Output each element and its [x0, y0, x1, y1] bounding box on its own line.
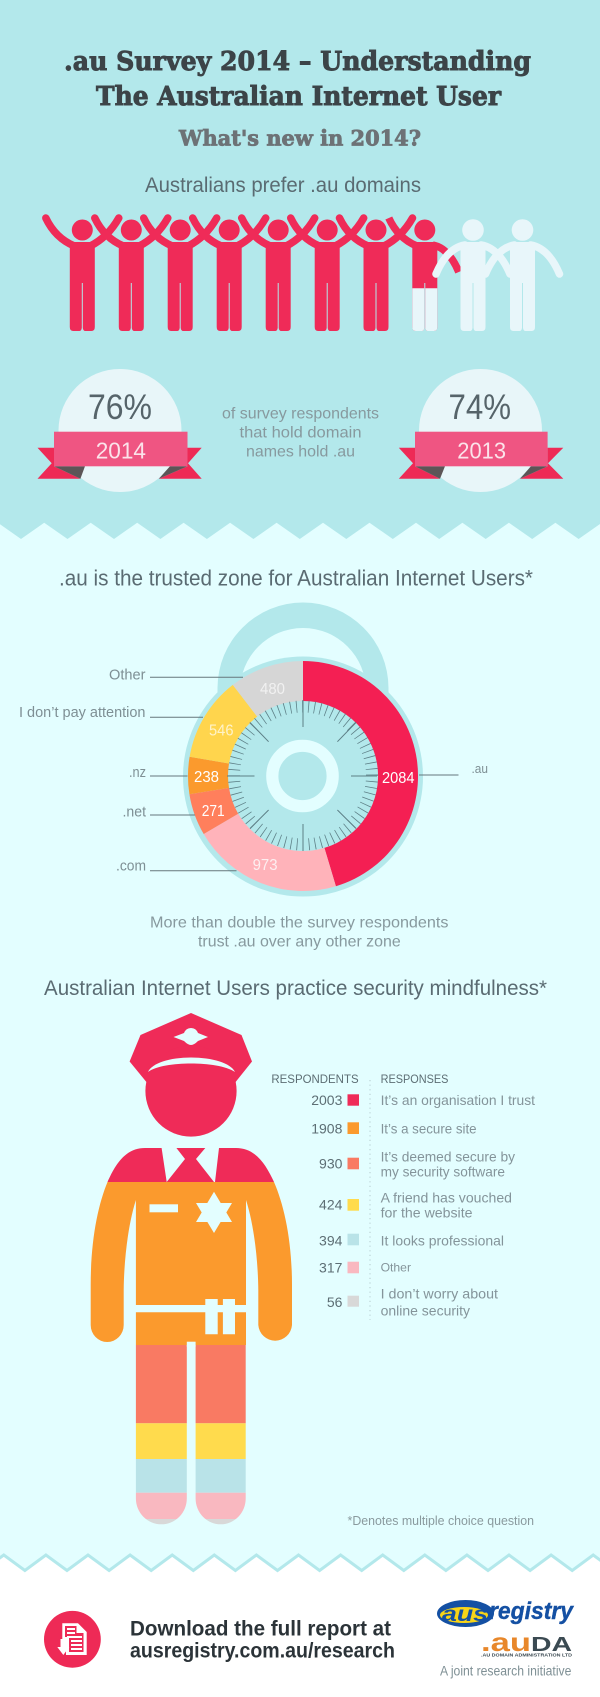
icon: download document [44, 1611, 101, 1668]
segment values: 480 [260, 681, 285, 698]
icon: left leg [135, 1345, 188, 1525]
badge: 74% 2013 [399, 369, 563, 492]
segment values: 2084 [382, 770, 415, 787]
text: of survey respondents: of survey respondents [222, 405, 379, 422]
footer band with zigzag edge [0, 1555, 600, 1697]
dial ticks [227, 700, 377, 851]
donut segment: .au 2084 [303, 661, 418, 886]
dial centre ring [272, 746, 333, 806]
row 930: 930 [319, 1156, 343, 1172]
badge: 76% 2014: 2014 [96, 437, 146, 463]
chart labels and leader lines: I don’t pay attention [19, 704, 146, 721]
call to action text [130, 1617, 395, 1662]
donut segment: .net 271 [189, 788, 238, 834]
caption: more than double [150, 914, 448, 951]
donut segment: .nz 238 [188, 757, 229, 794]
icon: belt and buckle [135, 1299, 246, 1334]
icon: orange shirt [91, 1182, 292, 1345]
icon: red person 4 [193, 218, 266, 331]
icon: red person 7 [340, 218, 412, 331]
row 394: 394 [319, 1232, 343, 1248]
segment values [194, 681, 415, 874]
icon: red person 1 [46, 218, 119, 331]
row 317: Other [381, 1261, 411, 1275]
title: The Australian Internet User [96, 82, 501, 112]
donut segment: .com 973 [204, 814, 336, 891]
text: of survey respondents [222, 405, 379, 460]
chart labels and leader lines [19, 666, 488, 875]
row 2003: It’s an organisation I trust [381, 1092, 535, 1108]
icon: red person 6 [291, 218, 364, 331]
leg gap [187, 1342, 196, 1347]
icon: white person 10 [486, 219, 560, 331]
icon: hat band [148, 1058, 235, 1072]
row 424: A friend has vouched [381, 1190, 512, 1206]
segment values: 546 [209, 723, 234, 740]
logo: auDA: .AU DOMAIN ADMINISTRATION LTD [481, 1652, 573, 1658]
segment values: 238 [194, 769, 219, 786]
row 56 [327, 1286, 498, 1318]
logo: auDA: .au [481, 1627, 531, 1657]
icon: red person 5 [242, 218, 315, 331]
row 930: It’s deemed secure by [381, 1148, 515, 1164]
caption: more than double: More than double the survey respondents [150, 914, 448, 931]
donut segment: other 480 [233, 661, 303, 717]
row 56: 56 [327, 1294, 343, 1310]
row 317: 317 [319, 1260, 343, 1276]
donut segment: don't pay attention 546 [190, 685, 257, 764]
heading: Australians prefer .au domains: Australians prefer .au domains [145, 174, 421, 197]
chart: padlock donut [183, 603, 423, 896]
table headers: RESPONDENTS [271, 1074, 359, 1086]
row 394 [319, 1232, 504, 1248]
text: of survey respondents: names hold .au [246, 443, 355, 460]
icon: white person 9 [436, 219, 510, 331]
table headers: RESPONSES [381, 1074, 449, 1086]
icon: lock shackle [218, 603, 388, 700]
row 424 [319, 1190, 512, 1220]
row 930: my security software [381, 1164, 505, 1180]
icon: red person 2 [95, 218, 168, 331]
chart labels and leader lines: Other [109, 666, 146, 683]
logo: ausregistry: aus [442, 1603, 488, 1626]
table headers [271, 1074, 449, 1320]
row 317 [319, 1260, 411, 1276]
icon: right leg [195, 1345, 247, 1525]
title [64, 47, 531, 112]
chart labels and leader lines: .net [122, 804, 147, 821]
icon: lock body [183, 656, 423, 896]
segment values: 973 [253, 857, 278, 874]
call to action text: ausregistry.com.au/research [130, 1638, 395, 1662]
badge: 76% 2014 [38, 369, 202, 492]
row 56: I don’t worry about [381, 1286, 498, 1302]
subtitle: What's new in 2014? [178, 126, 421, 151]
figure: policeman chart [91, 1013, 292, 1525]
text: of survey respondents: that hold domain [240, 424, 362, 441]
row 1908: It’s a secure site [381, 1120, 477, 1136]
row 424: for the website [381, 1204, 473, 1220]
badge: 74% 2013: 74% [448, 388, 511, 427]
icon: hat emblem [174, 1028, 208, 1045]
footnote: *Denotes multiple choice question [348, 1514, 534, 1528]
badge: 76% 2014: 76% [88, 388, 152, 427]
row 2003: 2003 [311, 1092, 343, 1108]
call to action text: Download the full report at [130, 1617, 391, 1641]
logo: auDA: DA [531, 1634, 572, 1656]
background: top band with zigzag edge [0, 0, 600, 539]
row 394: It looks professional [381, 1232, 504, 1248]
caption: more than double: trust .au over any other zone [198, 934, 401, 951]
legend table [271, 1074, 535, 1320]
icon: police hat [130, 1013, 252, 1082]
icon: collar and tie [108, 1148, 274, 1182]
icon: name tag [150, 1204, 178, 1212]
row 2003 [311, 1092, 535, 1108]
heading: trusted zone: .au is the trusted zone for Australian Internet Users* [59, 566, 533, 591]
icon: head [145, 1045, 237, 1137]
row 1908 [311, 1120, 477, 1136]
chart: row of people, 76 percent red [46, 218, 560, 331]
row 56: online security [381, 1302, 470, 1318]
title: .au Survey 2014 – Understanding [64, 47, 531, 77]
segment values: 271 [202, 803, 225, 820]
logo: ausregistry: registry [489, 1598, 575, 1625]
heading: security mindfulness: Australian Internet Users practice security mindfulness* [44, 977, 547, 1000]
row 424: 424 [319, 1197, 343, 1213]
icon: part red part white person 8 [389, 218, 459, 331]
chart labels and leader lines: .com [116, 858, 146, 875]
logo: auDA [481, 1627, 573, 1658]
chart labels and leader lines: .au [472, 761, 488, 776]
row 1908: 1908 [311, 1120, 343, 1136]
text: joint research initiative: A joint research initiative [440, 1664, 571, 1679]
icon: red person 3 [144, 218, 217, 331]
chart labels and leader lines: .nz [129, 764, 146, 781]
row 930 [319, 1148, 515, 1180]
icon: sheriff star [196, 1192, 232, 1233]
badge: 74% 2013: 2013 [457, 437, 506, 463]
logo: ausregistry [437, 1598, 575, 1627]
